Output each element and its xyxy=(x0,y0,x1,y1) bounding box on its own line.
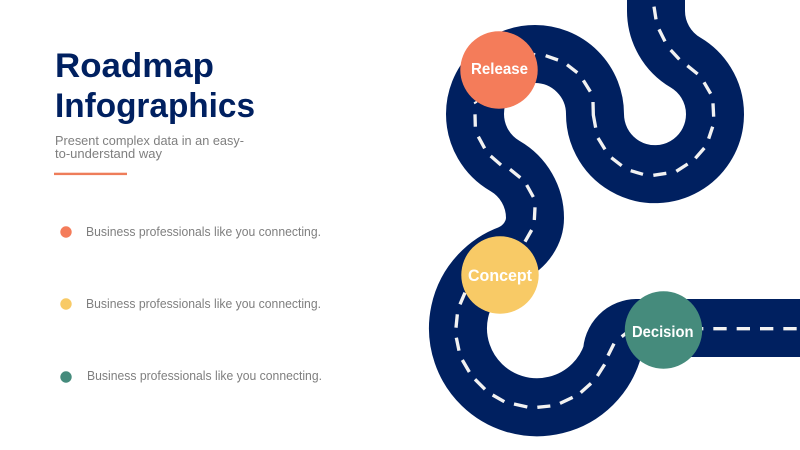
winding road xyxy=(458,0,800,407)
road centre dashes, upper section xyxy=(475,7,714,220)
accent rule xyxy=(54,173,127,175)
milestone: Concept xyxy=(461,236,539,314)
title xyxy=(55,47,255,125)
subtitle: Present complex data in an easy- xyxy=(55,134,244,148)
bullet list xyxy=(60,225,322,383)
subtitle: to-understand way xyxy=(55,147,163,161)
subtitle xyxy=(55,134,244,161)
title: Infographics xyxy=(55,87,255,125)
milestone: Release: Release xyxy=(471,61,528,78)
bullet item 2: Business professionals like you connecting. xyxy=(86,297,321,311)
milestone: Concept: Concept xyxy=(468,267,532,285)
bullet item 3: Business professionals like you connecting. xyxy=(87,369,322,383)
title: Roadmap xyxy=(55,47,214,85)
bullet item 1: Business professionals like you connecting. xyxy=(86,225,321,239)
road centre dashes, lower section xyxy=(456,230,797,407)
milestone: Decision: Decision xyxy=(632,324,694,341)
milestone: Release xyxy=(460,31,538,109)
milestone: Decision xyxy=(625,291,702,369)
